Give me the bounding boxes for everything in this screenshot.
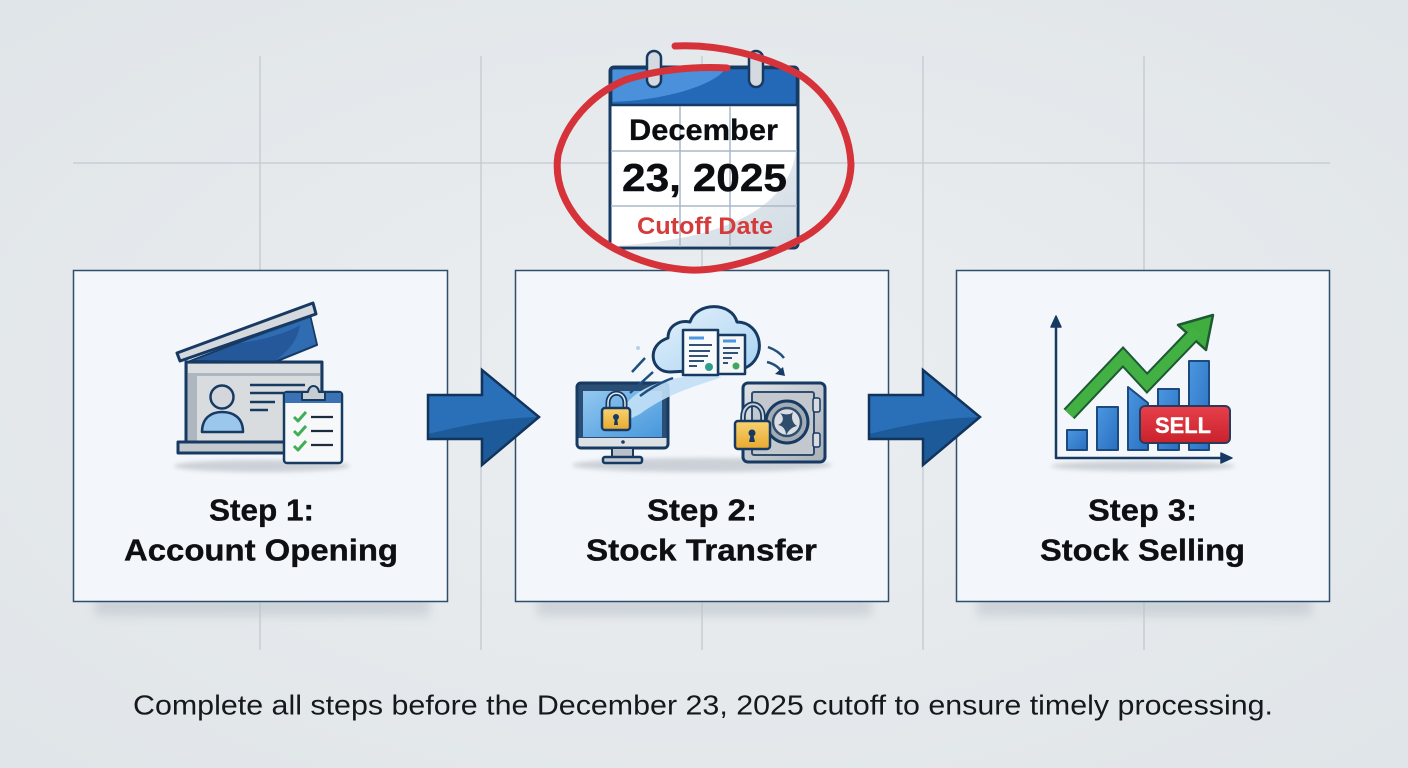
calendar month: December	[629, 114, 778, 147]
heading: step 3: Step 3:	[1088, 492, 1197, 528]
heading: stock transfer: Stock Transfer	[586, 532, 817, 568]
arrow: step 1 to step 2	[428, 370, 539, 465]
label: SELL: SELL	[1155, 413, 1211, 438]
calendar: cutoff date	[610, 51, 798, 248]
icon: ID scanner and checklist	[174, 303, 350, 472]
calendar caption: Cutoff Date	[637, 213, 773, 240]
icon: safe padlock	[735, 404, 770, 449]
panel: step 2 stock transfer	[516, 270, 888, 616]
calendar day and year: 23, 2025	[622, 157, 787, 200]
heading: step 2: Step 2:	[647, 492, 757, 528]
icon: secure transfer from computer to cloud and safe	[572, 307, 832, 472]
arrow: step 2 to step 3	[869, 370, 980, 465]
footer note: Complete all steps before the December 23, 2025 cutoff to ensure timely processing.	[133, 690, 1273, 720]
heading: stock selling: Stock Selling	[1040, 532, 1245, 568]
icon: monitor padlock	[602, 393, 630, 430]
heading: step 1: Step 1:	[209, 492, 314, 528]
panel: step 3 stock selling	[956, 270, 1330, 616]
red hand-drawn circle	[557, 46, 851, 270]
icon: rising chart with sell tag	[1051, 315, 1235, 471]
panel: step 1 account opening	[74, 270, 448, 616]
heading: account opening: Account Opening	[124, 532, 398, 568]
